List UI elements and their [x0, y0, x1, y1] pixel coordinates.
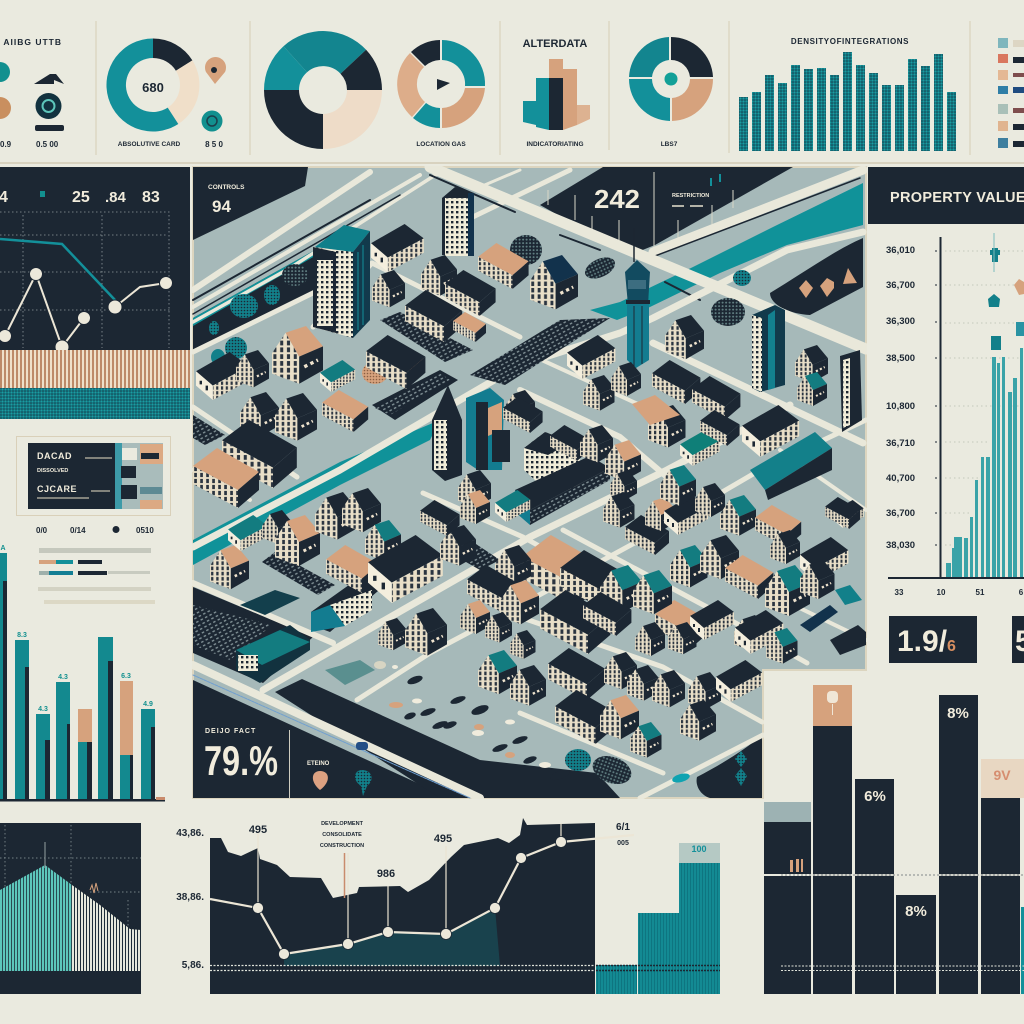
y axis labels: 36,700: [886, 280, 915, 291]
pier building: [311, 574, 378, 632]
chart: property value histogram: [886, 233, 1024, 597]
lower left teal hall: [236, 625, 310, 683]
houses: south district: [378, 535, 762, 758]
caption: right value: 0.5 00: [36, 140, 59, 149]
stat box: 1.9/6: [897, 625, 956, 658]
legend row: 0/14: [70, 526, 86, 535]
bar value labels: 6.3: [121, 673, 131, 680]
icon: teal badge: [202, 110, 222, 132]
icon: map pin: [205, 57, 226, 84]
dark stat corner: 94: 94: [212, 197, 231, 216]
icon: bulb: [827, 691, 838, 715]
caption: quarter donut: LBS7: [661, 141, 678, 148]
chart: teal dark cream donut: [106, 38, 199, 131]
spire tower: [625, 246, 650, 368]
icon: dark disc: [36, 93, 62, 119]
vertical guide lines: [258, 823, 561, 944]
point labels: 986: [377, 868, 395, 880]
bar value labels: 8.3: [17, 632, 27, 639]
legend row: [36, 526, 154, 535]
dark tree band: [193, 250, 315, 352]
bar value labels: 4.9: [143, 701, 153, 708]
dark stat corner: 79 percent: DEIJO FACT: [205, 728, 256, 735]
houses: center district: [603, 465, 860, 664]
chart: quarter donut: [629, 37, 713, 148]
chart header values: [0, 189, 160, 206]
stat box: [1012, 616, 1024, 663]
y axis labels: 38,030: [886, 540, 915, 551]
heading: density bars: DENSITYOFINTEGRATIONS: [791, 37, 909, 46]
canal: [193, 420, 440, 565]
y axis labels: 36,710: [886, 438, 915, 449]
houses: upper right district: [503, 255, 864, 528]
tall tower: teal roof: [313, 225, 370, 338]
y axis labels: 38,500: [886, 353, 915, 364]
center towers: [432, 385, 510, 481]
legend card: CJCARE: [37, 484, 77, 494]
icon: teal pond: [672, 774, 690, 782]
teal trees: [209, 235, 751, 789]
y axis labels: 10,800: [886, 401, 915, 412]
x axis labels: [895, 588, 1024, 597]
icon: play triangle: [437, 79, 450, 90]
point labels: [249, 822, 630, 880]
tall tower: top center: [442, 187, 474, 256]
icon: vehicle: [356, 742, 368, 750]
caption: donut one value: 8 5 0: [205, 140, 223, 149]
data line: [210, 835, 634, 954]
chart: mountain bars: [0, 823, 141, 994]
caption: play donut: LOCATION GAS: [416, 141, 466, 148]
panel: icon summary: [0, 37, 64, 149]
panel: property value: [868, 167, 1024, 663]
legend card: [16, 436, 170, 516]
y axis labels: 36,700: [886, 508, 915, 519]
bar percent labels: 9V: [993, 767, 1011, 783]
panel: density bars: [739, 37, 956, 151]
icon: roof arrow: [34, 74, 64, 84]
panel: city map: [193, 167, 866, 798]
dotted baselines: [210, 966, 720, 970]
teal trend line: [0, 239, 115, 300]
chart header values: 25: [72, 189, 90, 206]
point labels: 495: [434, 833, 452, 845]
y axis labels: [886, 245, 915, 551]
teal dotted band: [0, 388, 190, 419]
bar percent labels: 8%: [947, 705, 969, 722]
panel: altered stack: [523, 38, 590, 148]
long dark hall: [515, 456, 610, 525]
chart: silhouette line: [176, 818, 720, 994]
caption: left value: 0.9: [0, 140, 12, 149]
legend row: 0510: [136, 526, 154, 535]
chart header values: .84: [105, 189, 127, 206]
top highway strands: [193, 170, 863, 322]
parking grids: [193, 312, 610, 595]
chart: dark percent bars: [764, 685, 1024, 994]
chart: stepped bars: [523, 59, 590, 130]
y axis labels: 43,86.: [176, 828, 204, 839]
y axis labels: 5,86.: [182, 960, 204, 971]
stat box: [889, 616, 977, 663]
header strip: [0, 21, 1024, 163]
point labels: 005: [617, 840, 629, 847]
panel: line chart: [0, 167, 190, 419]
panel: donut one: [106, 38, 226, 149]
map ground: [193, 167, 866, 798]
dark stat corner: 94: [193, 167, 308, 240]
icon: pill bar: [35, 125, 64, 131]
y axis labels: 36,300: [886, 316, 915, 327]
chart: density bars: [739, 52, 956, 151]
bar value labels: 4.3: [58, 674, 68, 681]
point labels: 495: [249, 824, 267, 836]
chart header values: 83: [142, 189, 160, 206]
x axis labels: 51: [976, 588, 985, 597]
y axis labels: 38,86.: [176, 892, 204, 903]
river: [590, 183, 863, 320]
dark stat corner: 79 percent: [193, 680, 450, 798]
y axis labels: 40,700: [886, 473, 915, 484]
houses: west district: [210, 470, 530, 603]
x axis labels: 33: [895, 588, 904, 597]
note text: CONSTRUCTION: [320, 843, 364, 849]
x axis labels: 10: [937, 588, 946, 597]
caption: donut one: ABSOLUTIVE CARD: [118, 141, 181, 148]
bar value labels: 4.3: [38, 706, 48, 713]
donut value: 680: [142, 80, 164, 95]
icon: teal disc: [0, 62, 10, 82]
legend: top right: [998, 38, 1024, 148]
note text: CONSOLIDATE: [322, 832, 362, 838]
dark block: right tags: [770, 238, 863, 315]
chart: teal steps: 100: [691, 844, 707, 854]
heading: icon summary: AIIBG UTTB: [3, 37, 62, 47]
chart: teal steps: [596, 843, 720, 994]
legend card: DISSOLVED: [37, 468, 68, 474]
marker icons: [988, 233, 1024, 350]
chart: large donut: [264, 31, 382, 149]
houses: upper district: [193, 224, 529, 508]
dark block: lower right: [697, 735, 762, 798]
dark stat corner: 242: RESTRICTION: [672, 193, 709, 199]
copper stripe band: [0, 350, 190, 388]
icon: center dot: [664, 72, 678, 86]
caption: stepped bars: INDICATORIATING: [526, 141, 584, 148]
tall tower: far right: [840, 350, 862, 432]
parked cars and lots: [240, 585, 866, 782]
note text: DEVELOPMENT: [321, 821, 364, 827]
note text: [320, 821, 364, 849]
dark stat corner: 242: 242: [594, 184, 640, 214]
dark stat corner: 79 percent: 79.%: [204, 737, 278, 784]
chart: teal bar chart: [0, 545, 165, 802]
bar value labels: A: [0, 545, 6, 552]
dark stat corner: 94: CONTROLS: [208, 184, 245, 191]
chart: play donut: [397, 40, 485, 148]
road network: [193, 167, 866, 798]
dark stat corner: 79 percent: ETEINO: [307, 761, 330, 767]
y axis labels: [176, 828, 204, 971]
tall tower: right: [752, 305, 785, 392]
legend row: 0/0: [36, 526, 48, 535]
legend text lines: [38, 548, 155, 604]
dark band: lower: [275, 679, 620, 798]
white data line: [0, 268, 172, 354]
legend text: DACAD: [37, 451, 72, 461]
bar percent labels: 8%: [905, 903, 927, 920]
heading: altered stack: ALTERDATA: [523, 38, 587, 50]
bar percent labels: [864, 705, 1011, 920]
white block building: [524, 432, 580, 490]
bar value labels: [0, 545, 153, 713]
heading: property value: PROPERTY VALUE: [890, 190, 1024, 206]
x axis labels: 6: [1019, 588, 1024, 597]
y axis labels: 36,010: [886, 245, 915, 256]
dark stat corner: 242: [540, 167, 793, 255]
bar percent labels: 6%: [864, 788, 886, 805]
dark block: crop field: [193, 587, 313, 683]
point labels: 6/1: [616, 822, 630, 833]
long teal hall: [750, 432, 832, 500]
icon: tan disc: [0, 97, 11, 119]
